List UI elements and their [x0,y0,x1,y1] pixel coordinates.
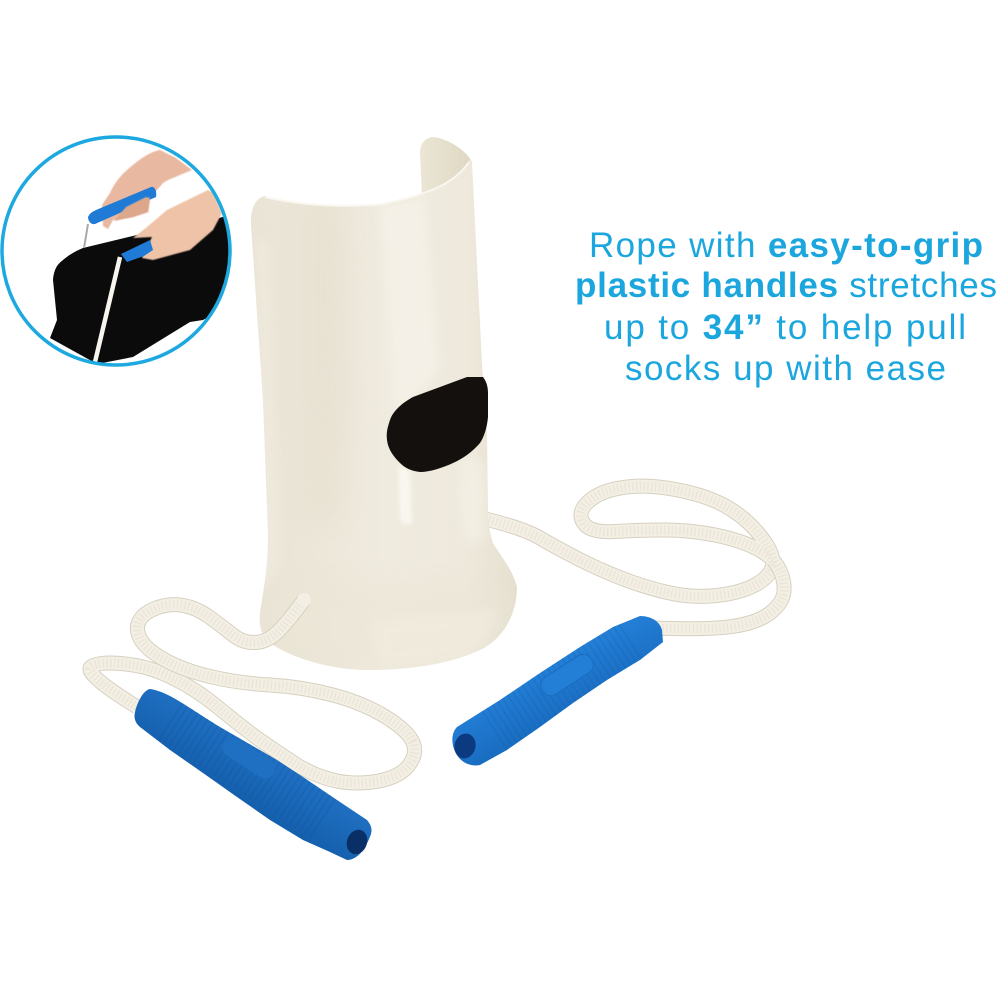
left blue handle [135,689,372,860]
black velcro pad [387,377,488,472]
caption line 2: plastic handles stretches [575,266,997,305]
caption line 4: socks up with ease [625,349,946,388]
white rope over knee [95,257,120,362]
rounded rope tip at sleeve [297,593,311,607]
lower hand [133,190,222,260]
sleeve top rim highlight [265,162,469,206]
left rope upper strand [137,600,412,742]
right rope upper strand [581,486,784,629]
caption line 3: up to 34” to help pull [604,308,966,347]
upper hand [102,150,192,229]
right handle thumb recess [540,654,594,696]
black leggings [50,217,240,364]
fingers over handle [114,197,150,221]
left handle thumb recess [223,738,275,778]
right rope lower strand [485,519,772,596]
infographic canvas [0,135,996,860]
caption line 1: Rope with easy-to-grip [589,226,983,265]
right blue handle [452,616,663,765]
inset photo: hands pulling handles over knee [2,137,240,365]
lower blue handle [121,240,153,262]
left rope lower strand [90,663,415,783]
left rope [90,593,415,783]
left handle hole [343,827,371,857]
inset circle border [2,137,230,365]
sleeve shading and highlights [390,203,482,658]
sleeve body [251,160,517,670]
thin rope behind knee [84,224,88,248]
caption [575,226,997,388]
right handle hole [452,731,478,761]
upper blue handle [88,187,156,224]
sock aid product [251,137,773,670]
back flap of sleeve [420,137,472,196]
